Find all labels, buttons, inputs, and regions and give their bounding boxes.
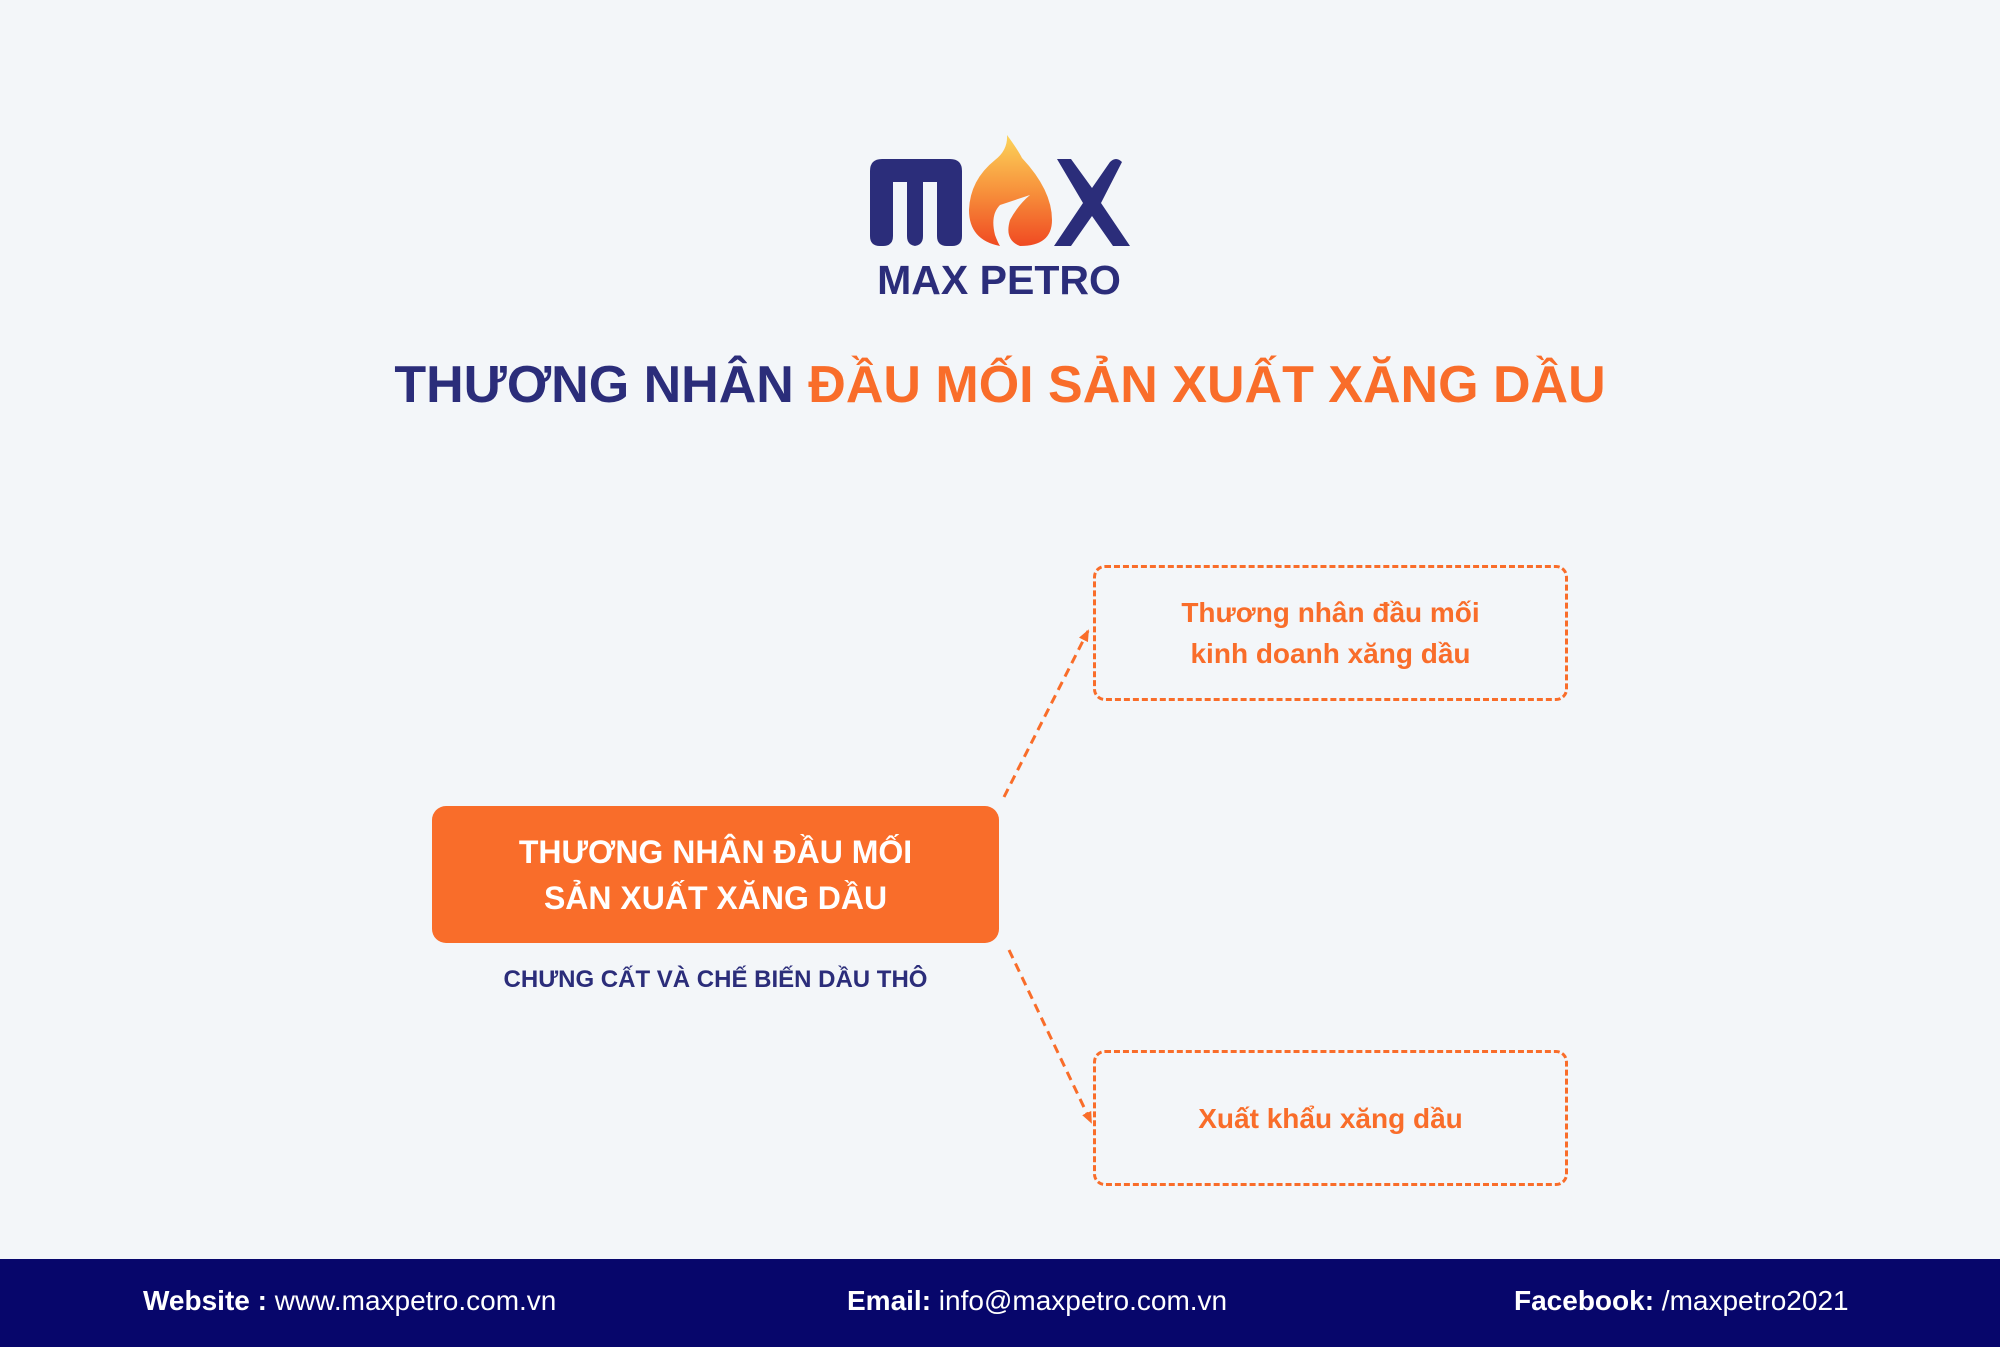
title: THƯƠNG NHÂN ĐẦU MỐI SẢN XUẤT XĂNG DẦU [394, 356, 1606, 414]
box: bottom: Xuất khẩu xăng dầu [1198, 1102, 1463, 1134]
box: top [1093, 565, 1568, 701]
arrow: down [1009, 950, 1091, 1122]
logo wordmark: MAX PETRO [877, 257, 1121, 303]
logo [870, 135, 1130, 303]
logo M [870, 159, 962, 246]
box: top: Thương nhân đầu mối [1181, 597, 1480, 628]
logo flame [969, 135, 1052, 246]
center box [432, 806, 999, 943]
center box: THƯƠNG NHÂN ĐẦU MỐI [519, 834, 912, 870]
box: top: kinh doanh xăng dầu [1190, 638, 1470, 669]
logo X [1054, 159, 1130, 246]
footer website: Website : www.maxpetro.com.vn [143, 1285, 556, 1316]
footer email: Email: info@maxpetro.com.vn [847, 1285, 1227, 1316]
arrow: up [1004, 631, 1088, 797]
box: bottom [1093, 1050, 1568, 1186]
center box: SẢN XUẤT XĂNG DẦU [544, 880, 887, 916]
subtitle: CHƯNG CẤT VÀ CHẾ BIẾN DẦU THÔ [504, 966, 927, 993]
footer facebook: Facebook: /maxpetro2021 [1514, 1285, 1849, 1316]
footer [0, 1259, 2000, 1347]
